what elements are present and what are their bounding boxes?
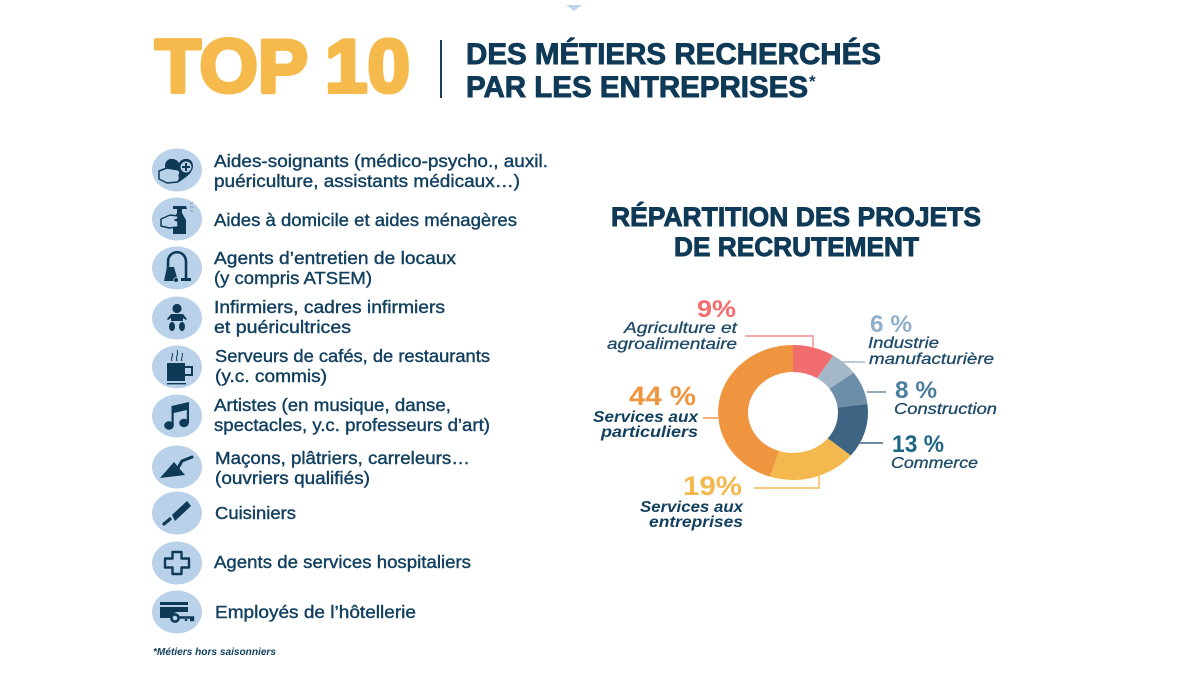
title divider [440, 40, 442, 98]
item 6: artistes [152, 394, 490, 438]
text: employés de l'hôtellerie: Employés de l’hôtellerie [215, 602, 416, 622]
label: services aux entreprises [640, 471, 819, 531]
label: construction [867, 377, 997, 418]
title: top 10: TOP [155, 24, 308, 108]
icon: knife [152, 492, 202, 534]
chart heading: DE RECRUTEMENT [674, 232, 919, 262]
text: agents de services hospitaliers: Agents de services hospitaliers [214, 552, 471, 572]
item 7: maçons [152, 446, 470, 488]
text: agents d'entretien: (y compris ATSEM) [214, 268, 372, 288]
label: commerce: Commerce [891, 455, 978, 472]
item 3: agents d'entretien [152, 246, 456, 290]
segment: services aux particuliers 44% [718, 345, 793, 477]
item 4: infirmiers [152, 296, 445, 340]
text: artistes: spectacles, y.c. professeurs d’art) [214, 415, 490, 435]
text: cuisiniers: Cuisiniers [215, 503, 296, 523]
text: maçons [215, 448, 470, 488]
text: infirmiers [214, 297, 445, 337]
label: industrie: Industrie [868, 335, 939, 352]
title: top 10: 10 [325, 24, 410, 108]
icon: heart and hand [152, 148, 202, 192]
text: serveurs: (y.c. commis) [215, 366, 327, 386]
segment: agriculture 9% [793, 345, 833, 378]
label: services aux entreprises: Services aux [640, 499, 744, 516]
label: services aux particuliers: Services aux [593, 409, 699, 426]
label: agriculture: agroalimentaire [607, 336, 737, 353]
label: agriculture: 9% [697, 296, 736, 323]
text: aides-soignants [214, 151, 548, 191]
label: services aux entreprises: 19% [683, 471, 742, 501]
subtitle: * [809, 72, 816, 91]
text: artistes [214, 395, 490, 435]
segment: services aux entreprises 19% [770, 438, 851, 480]
text: serveurs: Serveurs de cafés, de restaurants [215, 346, 490, 366]
text: serveurs [215, 346, 490, 386]
label: construction: Construction [894, 401, 997, 418]
text: maçons: Maçons, plâtriers, carreleurs… [215, 448, 470, 468]
text: artistes: Artistes (en musique, danse, [214, 395, 451, 415]
text: aides à domicile: Aides à domicile et aides ménagères [214, 210, 517, 230]
donut chart [718, 345, 868, 480]
text: maçons: (ouvriers qualifiés) [215, 468, 370, 488]
label: services aux particuliers [593, 381, 718, 441]
subtitle: DES MÉTIERS RECHERCHÉS [466, 37, 881, 71]
item 5: serveurs [152, 346, 490, 388]
chart heading [611, 201, 981, 262]
segment: construction 8% [829, 373, 867, 407]
icon: baby [152, 296, 202, 340]
chart heading: RÉPARTITION DES PROJETS [611, 201, 981, 232]
icon: vacuum cleaner [152, 246, 202, 290]
label: industrie: manufacturière [869, 351, 994, 368]
icon: medical cross [152, 542, 202, 584]
label: industrie: 6 % [870, 311, 912, 338]
icon: steaming cup [152, 346, 202, 388]
segment: industrie 6% [817, 356, 854, 389]
icon: key card [152, 590, 202, 634]
label: services aux entreprises: entreprises [649, 514, 743, 531]
top marker triangle [566, 5, 582, 11]
icon: trowel [152, 446, 202, 488]
subtitle: PAR LES ENTREPRISES [466, 71, 808, 104]
label: construction: 8 % [895, 377, 937, 404]
icon: musical notes [152, 394, 202, 438]
subtitle [466, 37, 881, 104]
label: commerce: 13 % [892, 431, 944, 458]
text: agents d'entretien [214, 248, 456, 288]
text: aides-soignants: Aides-soignants (médico-psycho., auxil. [214, 151, 548, 171]
footnote: *Métiers hors saisonniers [153, 646, 276, 658]
item 2: aides à domicile [152, 198, 517, 240]
panel: list of ten jobs [152, 148, 548, 634]
text: aides-soignants: puériculture, assistants médicaux…) [214, 171, 520, 191]
text: infirmiers: et puéricultrices [214, 317, 351, 337]
item 8: cuisiniers [152, 492, 296, 534]
label: services aux particuliers: 44 % [629, 381, 696, 411]
text: infirmiers: Infirmiers, cadres infirmiers [214, 297, 445, 317]
label: agriculture [607, 296, 813, 353]
item 1: aides-soignants [152, 148, 548, 192]
label: commerce [860, 431, 978, 472]
title: top 10 [155, 24, 410, 108]
label: services aux particuliers: particuliers [600, 424, 698, 441]
segment: commerce 13% [828, 404, 868, 456]
label: agriculture: Agriculture et [623, 320, 738, 337]
item 9: agents de services hospitaliers [152, 542, 471, 584]
item 10: employés de l'hôtellerie [152, 590, 416, 634]
label: industrie [842, 311, 994, 368]
icon: spray bottle and hand [152, 198, 202, 240]
text: agents d'entretien: Agents d’entretien de locaux [214, 248, 456, 268]
